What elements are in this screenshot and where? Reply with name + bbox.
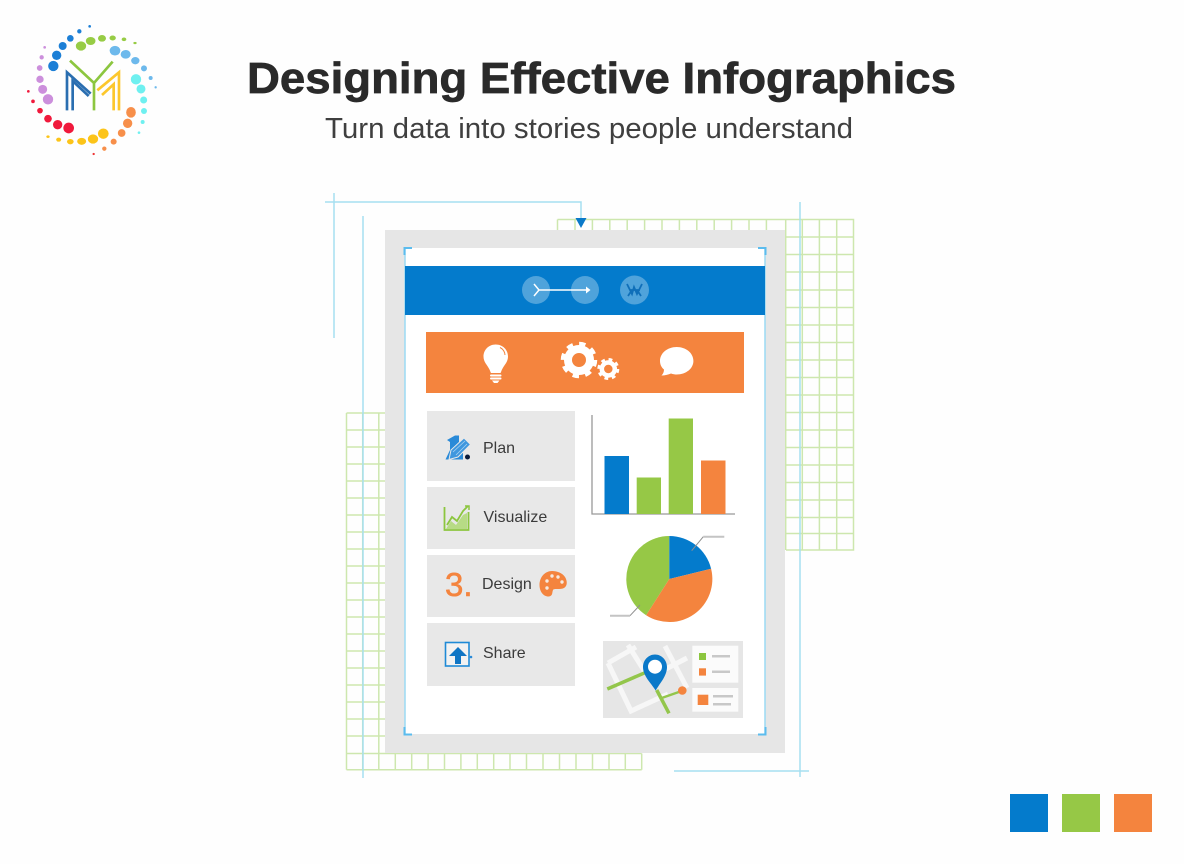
green grid: top right [558,220,854,550]
icon: gears [563,344,618,378]
map destination dot [678,686,687,695]
step card: visualize [427,487,575,549]
page frame [385,230,785,753]
icon: numeral one with pencil [446,436,470,460]
icon: light bulb [484,344,508,383]
label: share: Share [483,645,526,662]
bar chart [592,415,735,514]
icon: circles and arrow [522,276,649,304]
icon: palette [540,571,567,597]
legend panel bottom [692,688,738,712]
label: visualize: Visualize [484,509,547,526]
logo: dotted spiral M [27,25,157,155]
map roads [608,645,687,711]
map pin [643,654,667,690]
pie chart [610,536,724,622]
numeral three: 3. [445,566,473,603]
legend panel top [692,646,738,683]
header band [405,266,765,315]
subtitle: Turn data into stories people understand [325,113,853,145]
label: plan: Plan [483,440,515,457]
page sheet [404,248,766,734]
guide lines [325,193,809,778]
label: design: Design [482,576,532,593]
colour swatches [1010,794,1152,832]
orange icon band [426,332,744,393]
step card: design [427,555,575,617]
green grid: bottom left [346,413,642,770]
icon: speech bubble [660,347,693,376]
step card: plan [427,411,575,481]
map with legend [603,641,743,718]
icon: growth chart [444,506,469,530]
arrow marker [576,218,586,228]
title: Designing Effective Infographics [247,54,956,103]
icon: upload arrow [446,642,472,666]
step card: share [427,623,575,686]
